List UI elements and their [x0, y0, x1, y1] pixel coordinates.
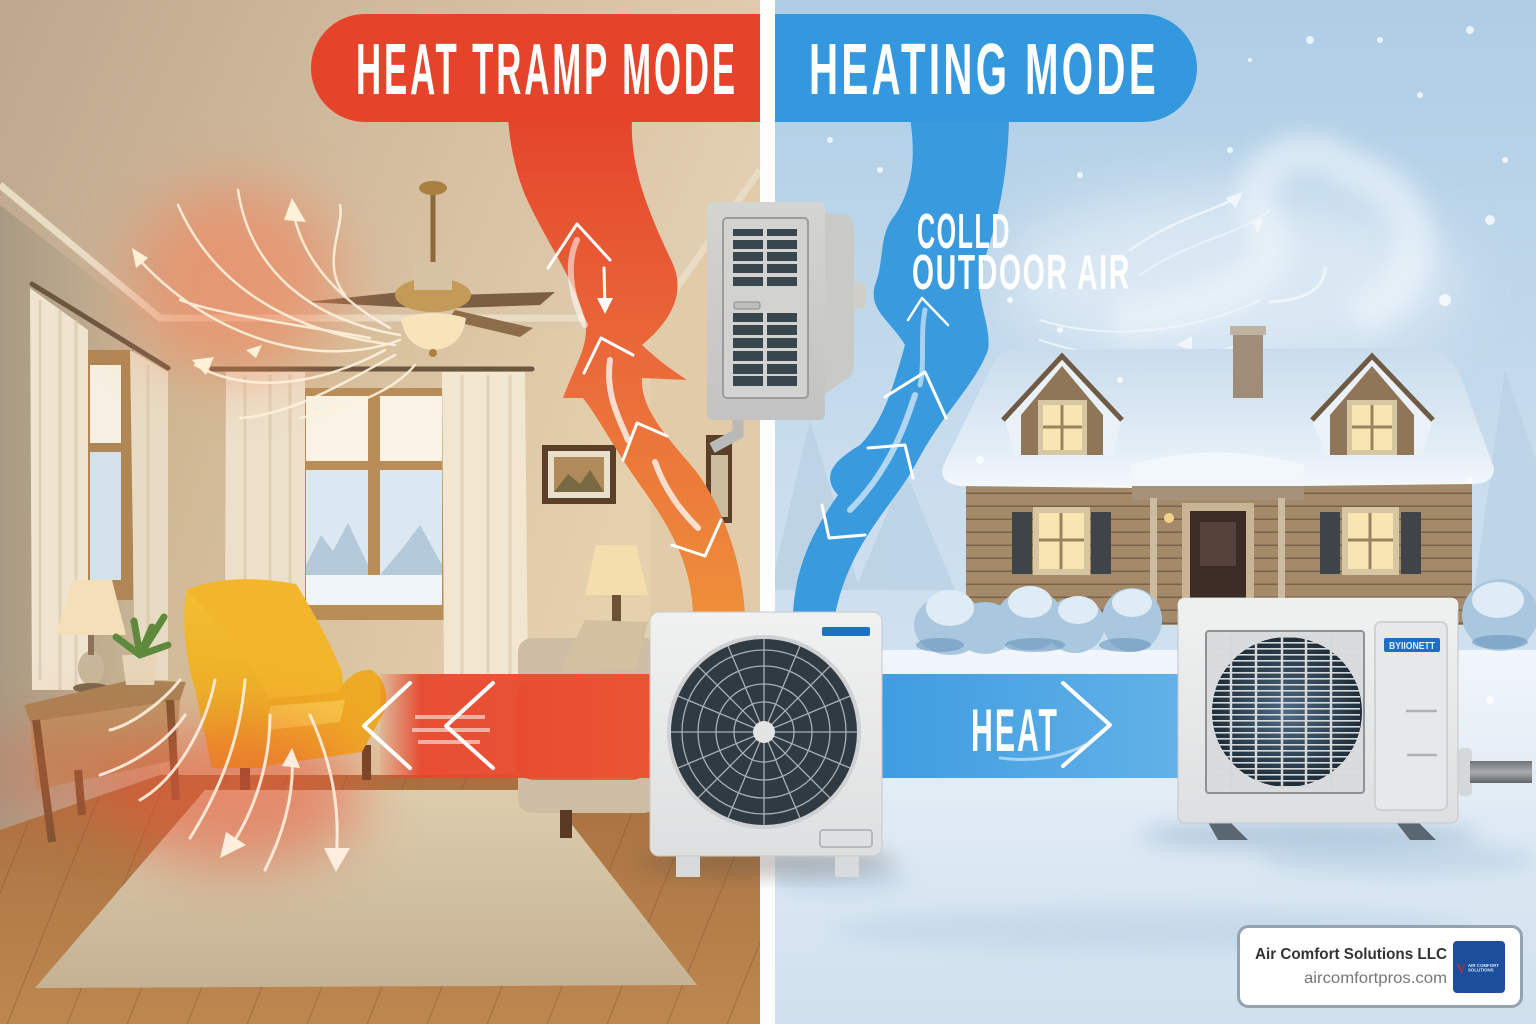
logo: AIR COMFORT	[1468, 963, 1499, 968]
feet	[1208, 822, 1436, 840]
wood floor	[0, 775, 760, 1024]
fan dark disc	[1212, 637, 1362, 787]
left wing and arm	[184, 590, 270, 768]
chimney	[1230, 326, 1266, 398]
vertical grille lines	[1231, 635, 1331, 789]
heating mode banner: HEATING MODE	[809, 30, 1159, 110]
snow-covered shrubs	[914, 579, 1536, 655]
left window	[85, 350, 133, 600]
fan disc	[667, 635, 861, 829]
ceiling fan	[305, 181, 555, 357]
rug	[35, 790, 697, 988]
right table lamp	[585, 545, 648, 625]
fan guard rings and spokes	[671, 639, 857, 825]
heat transfer band, left	[364, 674, 650, 778]
indoor air handler unit	[707, 202, 866, 448]
side housing	[822, 212, 854, 396]
casing	[650, 612, 882, 856]
company name: Air Comfort Solutions LLC	[1255, 946, 1447, 963]
lower vents	[733, 313, 797, 386]
back wall	[160, 330, 650, 790]
cold outdoor air label: COLLD	[917, 205, 1011, 259]
upper vents	[733, 229, 797, 286]
fan hub	[753, 721, 775, 743]
house	[942, 326, 1494, 633]
red heat glow, lower	[105, 725, 365, 865]
panel slots	[1406, 711, 1437, 755]
heat trap mode banner: HEAT TRAMP MODE	[356, 30, 738, 110]
cold outdoor air label: OUTDOOR AIR	[912, 246, 1131, 300]
red heat glow, upper	[130, 185, 340, 375]
sky haze	[1000, 190, 1460, 370]
potted plant	[116, 617, 168, 685]
logo	[1453, 941, 1505, 993]
heat trap mode banner	[311, 14, 760, 122]
brand badge	[822, 627, 870, 636]
roof shadow band	[1130, 452, 1305, 490]
small wall picture	[706, 435, 732, 523]
center outdoor unit with fan	[636, 612, 896, 877]
side table	[24, 680, 186, 842]
panel: indoor room, heat trap mode	[0, 0, 760, 1024]
fan grille frame	[1206, 631, 1364, 793]
snowy roof	[942, 348, 1494, 488]
heating mode banner	[775, 14, 1197, 122]
horizontal grille lines	[1210, 635, 1360, 789]
side knob	[853, 282, 866, 309]
wind swirl in the sky	[1040, 154, 1414, 359]
white center divider	[760, 0, 775, 1024]
snowy background trees	[770, 370, 1536, 620]
sofa	[516, 620, 658, 838]
curtain rods	[32, 284, 532, 369]
website: aircomfortpros.com	[1304, 970, 1447, 987]
brand badge	[1384, 638, 1440, 652]
blue cold airflow ribbon	[793, 118, 1009, 615]
upper heat swirl arrows	[135, 190, 415, 418]
center window	[298, 388, 448, 620]
brand badge	[1238, 926, 1522, 1006]
left ground window	[1012, 507, 1111, 575]
pipe	[1458, 748, 1532, 796]
wind swirl arrowheads	[1176, 192, 1263, 380]
blue ribbon arrows	[822, 298, 948, 538]
left dormer	[1003, 352, 1122, 456]
legs	[240, 750, 250, 790]
front door	[1150, 498, 1285, 633]
heat label: HEAT	[971, 697, 1059, 764]
right outdoor condenser unit	[1178, 598, 1532, 840]
indicator	[734, 302, 760, 309]
upper heat swirl arrowheads	[132, 198, 306, 375]
feet	[676, 852, 700, 877]
drain pipe	[712, 418, 738, 448]
body	[707, 202, 825, 420]
seat and right arm	[250, 670, 386, 768]
snow ground	[770, 650, 1536, 1024]
side service panel	[1375, 622, 1447, 810]
brand badge: BYIIONETT	[1389, 641, 1435, 652]
logo: SOLUTIONS	[1468, 968, 1494, 972]
left table lamp	[56, 580, 126, 693]
service plate	[820, 830, 872, 847]
yellow armchair	[184, 579, 386, 790]
curtains	[30, 288, 528, 690]
falling snowflakes	[827, 26, 1508, 748]
left-pointing chevrons	[364, 683, 493, 768]
grille frame	[723, 218, 808, 398]
right ground window	[1320, 507, 1421, 575]
red heat airflow ribbon	[508, 118, 745, 615]
right wall	[650, 175, 760, 640]
heat arrow	[1000, 683, 1110, 766]
motion lines	[412, 717, 490, 742]
cold outdoor air label	[912, 205, 1131, 300]
heat transfer band, right	[882, 674, 1178, 778]
red glow, band left	[0, 720, 160, 820]
ceiling crown molding	[0, 170, 760, 318]
red ribbon arrowhead	[597, 298, 613, 314]
framed picture	[542, 445, 616, 504]
house wall	[966, 480, 1472, 625]
panel: outdoor snowy scene, heating mode	[770, 0, 1536, 1024]
chair back	[186, 579, 345, 720]
casing	[1178, 598, 1458, 823]
left wall	[0, 205, 160, 830]
lower heat swirl arrowheads	[220, 748, 350, 872]
right dormer	[1312, 352, 1433, 456]
red ribbon arrows	[548, 224, 721, 556]
lower heat swirl arrows	[100, 680, 337, 870]
